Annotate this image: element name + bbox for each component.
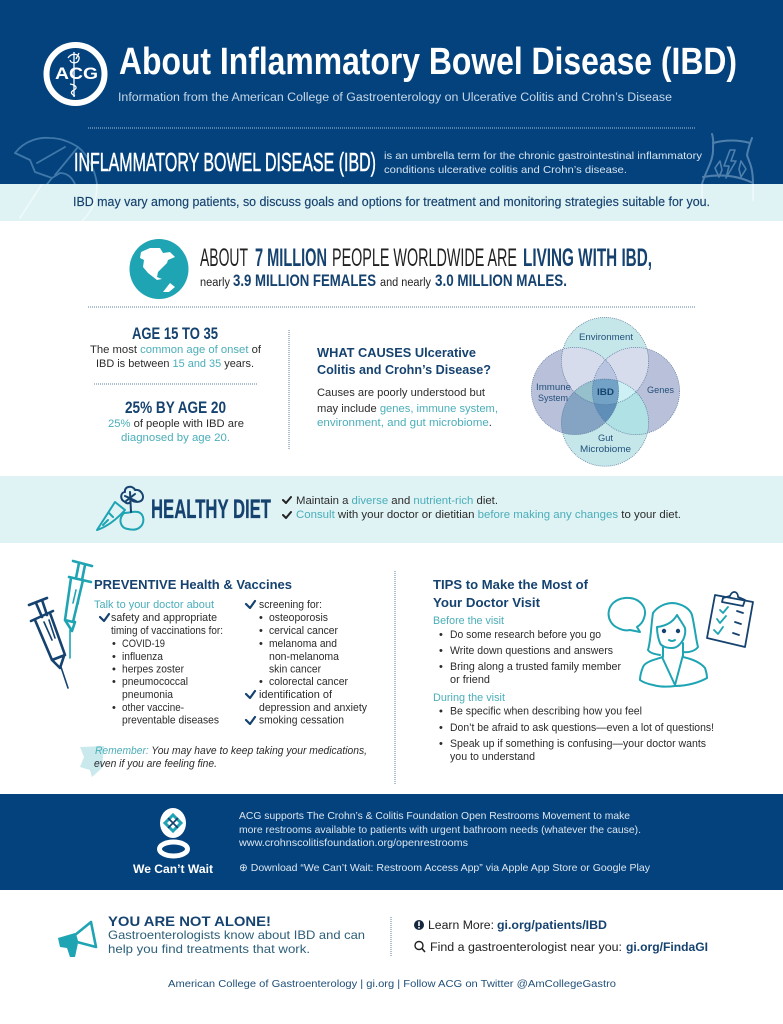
icon: abdomen with lightning xyxy=(702,134,753,184)
links: learn more and find a gastroenterologist: Find a gastroenterologist near you: xyxy=(430,942,622,954)
chart: venn diagram: Environment xyxy=(579,332,633,343)
list: during the visit: • xyxy=(439,722,443,734)
icon: ACG logo xyxy=(46,45,104,103)
stat: age 15 to 35: IBD is between 15 and 35 years. xyxy=(96,358,254,370)
list: before the visit: Bring along a trusted family member xyxy=(450,661,621,673)
stat: age 15 to 35 xyxy=(90,324,262,370)
icon: syringes xyxy=(29,561,92,688)
list: before the visit: or friend xyxy=(450,674,490,686)
headline: 7 million: PEOPLE WORLDWIDE ARE xyxy=(332,244,517,272)
list: screening: colorectal cancer xyxy=(269,676,348,688)
heading: tips: Your Doctor Visit xyxy=(433,595,541,610)
stat: 25 percent by age 20: 25% BY AGE 20 xyxy=(125,398,226,417)
sub-headline: females and males: and nearly xyxy=(380,277,431,289)
icon: umbrella xyxy=(14,136,98,184)
list: before the visit: • xyxy=(439,661,443,673)
links: learn more and find a gastroenterologist: gi.org/patients/IBD xyxy=(497,920,607,932)
panel: healthy diet xyxy=(0,476,783,543)
list: screening: • xyxy=(259,625,263,637)
diet tips xyxy=(296,495,681,521)
list: during the visit: • xyxy=(439,706,443,718)
sub-headline: females and males: 3.9 MILLION FEMALES xyxy=(233,271,376,290)
text: gastroenterologists xyxy=(108,928,365,956)
icon: checkmarks xyxy=(283,497,291,518)
icon: megaphone xyxy=(58,922,96,957)
list: screening: non-melanoma xyxy=(269,651,340,663)
list: vaccinations xyxy=(94,599,223,726)
heading: tips: TIPS to Make the Most of xyxy=(433,577,589,592)
chart: venn diagram: Immune xyxy=(536,382,571,393)
list: screening: identification of xyxy=(259,689,333,701)
stat: age 15 to 35: The most common age of onset of xyxy=(90,344,262,356)
text: open restrooms movement: ACG supports The Crohn’s & Colitis Foundation Open Restrooms Movement to make xyxy=(239,810,630,822)
headline: 7 million: 7 MILLION xyxy=(255,244,327,272)
subtitle: Information from the American College of Gastroenterology on Ulcerative Colitis and Crohn’s Disease xyxy=(118,92,672,104)
heading: tips xyxy=(433,577,589,610)
list: screening: • xyxy=(259,676,263,688)
list: vaccinations: pneumococcal xyxy=(122,676,188,688)
list: during the visit: Be specific when describing how you feel xyxy=(450,706,642,718)
heading: healthy diet: HEALTHY DIET xyxy=(151,494,271,524)
list: screening: • xyxy=(259,638,263,650)
chart: venn diagram xyxy=(531,317,680,466)
icon: speech bubble xyxy=(609,598,645,632)
list: screening: osteoporosis xyxy=(269,612,328,624)
text: gastroenterologists: Gastroenterologists know about IBD and can xyxy=(108,928,365,942)
panel: doctor visit tips xyxy=(433,577,714,763)
links: learn more and find a gastroenterologist: Learn More: xyxy=(428,920,494,932)
footer: American College of Gastroenterology | gi.org | Follow ACG on Twitter @AmCollegeGastro xyxy=(168,978,616,990)
text: open restrooms movement: www.crohnscolitisfoundation.org/openrestrooms xyxy=(238,837,468,849)
panel: restrooms band xyxy=(0,794,783,890)
diet tips: Consult with your doctor or dietitian before making any changes to your diet. xyxy=(296,509,681,521)
icon: clipboard xyxy=(707,592,753,647)
text: open restrooms movement: more restrooms available to patients with urgent bathroom needs (whatever the cause). xyxy=(239,824,641,836)
list: during the visit: you to understand xyxy=(450,751,535,763)
callout: remember: Remember: You may have to keep taking your medications, xyxy=(95,745,367,757)
stat: age 15 to 35: AGE 15 TO 35 xyxy=(132,324,218,343)
heading: preventive: PREVENTIVE Health & Vaccines xyxy=(94,577,292,592)
list: screening: smoking cessation xyxy=(259,714,344,726)
heading: you are not alone: YOU ARE NOT ALONE! xyxy=(108,913,271,929)
diet tips: Maintain a diverse and nutrient-rich diet. xyxy=(296,495,498,507)
definition text: is an umbrella term for the chronic gastrointestinal inflammatory xyxy=(384,150,703,162)
text block: what causes: may include genes, immune system, xyxy=(317,403,498,415)
callout: remember xyxy=(94,745,367,770)
list: screening: melanoma and xyxy=(269,638,337,650)
chart: venn diagram: System xyxy=(538,393,568,404)
list: during the visit: Speak up if something is confusing—your doctor wants xyxy=(450,738,706,750)
list: vaccinations: • xyxy=(112,676,116,688)
list: vaccinations: preventable diseases xyxy=(122,714,219,726)
definition text xyxy=(384,150,703,176)
list: during the visit xyxy=(433,692,714,763)
chart: venn diagram: Microbiome xyxy=(580,444,631,455)
panel: discussion band xyxy=(0,184,783,221)
heading: inflammatory bowel disease: INFLAMMATORY BOWEL DISEASE (IBD) xyxy=(74,147,376,177)
stat: 25 percent by age 20 xyxy=(108,398,244,444)
text block: what causes: Colitis and Crohn’s Disease? xyxy=(317,362,491,377)
text: open restrooms movement xyxy=(238,810,651,874)
list: before the visit: Do some research before you go xyxy=(450,629,601,641)
list: vaccinations: Talk to your doctor about xyxy=(94,599,214,611)
panel: you are not alone xyxy=(58,913,365,957)
sub-headline: females and males: nearly xyxy=(200,277,230,289)
list: vaccinations: influenza xyxy=(122,651,164,663)
list: before the visit: • xyxy=(439,645,443,657)
headline: 7 million: LIVING WITH IBD, xyxy=(523,244,652,272)
icon: globe xyxy=(130,239,188,299)
list: before the visit: • xyxy=(439,629,443,641)
list: during the visit: Don’t be afraid to ask questions—even a lot of questions! xyxy=(450,722,714,734)
list: vaccinations: herpes zoster xyxy=(122,664,184,676)
list: screening: skin cancer xyxy=(269,664,321,676)
list: screening: depression and anxiety xyxy=(259,702,367,714)
list: during the visit: During the visit xyxy=(433,692,505,704)
definition text: conditions ulcerative colitis and Crohn’s disease. xyxy=(384,164,627,176)
list: screening: cervical cancer xyxy=(269,625,338,637)
panel: prevalence xyxy=(130,239,652,299)
list: vaccinations: COVID-19 xyxy=(122,638,165,650)
links: learn more and find a gastroenterologist: gi.org/FindaGI xyxy=(626,942,708,954)
icon: ACG logo: ACG xyxy=(55,65,98,83)
callout: remember: even if you are feeling fine. xyxy=(94,758,217,770)
icon: toilet: We Can’t Wait xyxy=(133,864,213,876)
list: vaccinations: • xyxy=(112,651,116,663)
text: open restrooms movement: ⊕ Download “We Can’t Wait: Restroom Access App” via Apple App Store or Google Play xyxy=(239,862,651,874)
text block: what causes: Causes are poorly understood but xyxy=(317,387,485,399)
list: during the visit: • xyxy=(439,738,443,750)
icon: toilet xyxy=(133,808,213,876)
list: screening xyxy=(246,599,367,726)
list: before the visit: Before the visit xyxy=(433,615,504,627)
list: before the visit: Write down questions and answers xyxy=(450,645,613,657)
icon: ribbon xyxy=(80,746,104,777)
text: gastroenterologists: help you find treatments that work. xyxy=(108,942,310,956)
sub-headline: females and males: 3.0 MILLION MALES. xyxy=(435,271,567,290)
list: screening: screening for: xyxy=(259,599,322,611)
list: vaccinations: • xyxy=(112,638,116,650)
list: vaccinations: • xyxy=(112,702,116,714)
links: learn more and find a gastroenterologist xyxy=(414,920,708,954)
headline: 7 million: ABOUT xyxy=(200,244,248,272)
stat: 25 percent by age 20: 25% of people with IBD are xyxy=(108,418,244,430)
stat: 25 percent by age 20: diagnosed by age 20. xyxy=(121,432,230,444)
icon: doctor xyxy=(640,603,707,687)
list: vaccinations: • xyxy=(112,664,116,676)
text block: what causes xyxy=(317,345,498,429)
list: vaccinations: safety and appropriate xyxy=(111,612,217,624)
chart: venn diagram: Genes xyxy=(647,385,674,396)
list: screening: • xyxy=(259,612,263,624)
text block: what causes: WHAT CAUSES Ulcerative xyxy=(317,345,476,360)
panel: preventive health and vaccines xyxy=(80,577,367,777)
panel: discussion band: IBD may vary among patients, so discuss goals and options for treatment and monitoring strategies suitable for you. xyxy=(73,195,710,209)
panel: header xyxy=(0,0,783,184)
icon: vegetables and apple xyxy=(97,487,143,530)
text block: what causes: environment, and gut microbiome . xyxy=(317,417,492,429)
list: before the visit xyxy=(433,615,621,686)
sub-headline: females and males xyxy=(200,271,567,290)
chart: venn diagram: Gut xyxy=(598,433,613,444)
list: vaccinations: pneumonia xyxy=(122,689,174,701)
list: vaccinations: other vaccine- xyxy=(122,702,184,714)
chart: venn diagram: IBD xyxy=(597,387,614,398)
list: vaccinations: timing of vaccinations for: xyxy=(111,625,223,637)
